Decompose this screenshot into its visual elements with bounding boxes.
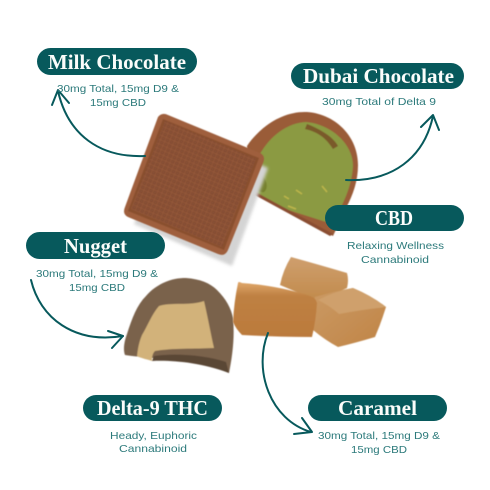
label: nugget: 15mg CBD	[69, 282, 125, 294]
label: milk chocolate: Milk Chocolate	[48, 50, 186, 74]
label: dubai chocolate: 30mg Total of Delta 9	[322, 96, 436, 108]
label: milk chocolate	[37, 48, 197, 109]
label: caramel: 15mg CBD	[351, 444, 407, 456]
label: CBD: CBD	[375, 206, 413, 230]
chocolate shadow	[134, 126, 268, 266]
label: milk chocolate: 15mg CBD	[90, 97, 146, 109]
caramel pieces	[233, 257, 386, 347]
arrow: milk chocolate	[52, 90, 145, 156]
label: CBD: Cannabinoid	[361, 254, 429, 266]
label: dubai chocolate	[291, 63, 464, 108]
label: caramel	[308, 395, 447, 456]
label: dubai chocolate: Dubai Chocolate	[303, 64, 454, 88]
label: delta-9 THC: Delta-9 THC	[97, 396, 208, 420]
label: caramel: Caramel	[338, 396, 417, 420]
arrow: caramel	[263, 333, 312, 434]
arrow: dubai chocolate	[346, 115, 439, 180]
label: caramel: 30mg Total, 15mg D9 &	[318, 430, 440, 442]
label: delta-9 THC: Cannabinoid	[119, 443, 187, 455]
label: delta-9 THC: Heady, Euphoric	[110, 430, 197, 442]
label: milk chocolate: 30mg Total, 15mg D9 &	[57, 83, 179, 95]
label: nugget	[26, 232, 165, 294]
arrow: nugget	[31, 280, 123, 348]
milk chocolate square	[124, 114, 264, 255]
label: CBD	[325, 205, 464, 266]
label: delta-9 THC	[83, 395, 222, 455]
dubai chocolate piece	[247, 112, 358, 236]
label: CBD: Relaxing Wellness	[347, 240, 444, 252]
label: nugget: 30mg Total, 15mg D9 &	[36, 268, 158, 280]
nugget piece	[124, 278, 234, 373]
label: nugget: Nugget	[64, 234, 128, 258]
